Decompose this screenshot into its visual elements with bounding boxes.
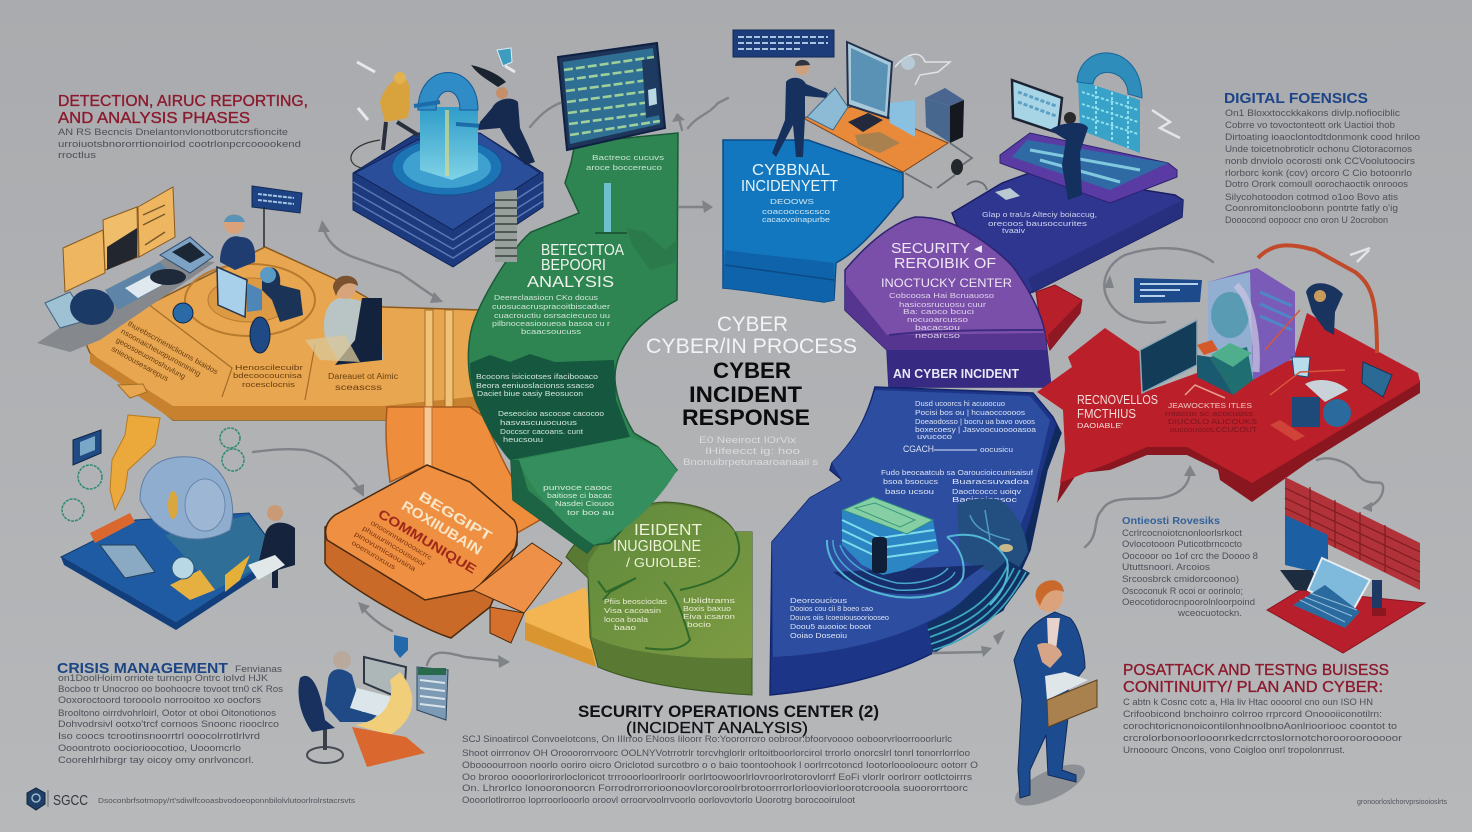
title: cyber incident response: RESPONSE xyxy=(682,405,810,430)
text: post attack continuity body: Urnooourc Oncons, vono Coigloo onrl tropolonrrust. xyxy=(1123,745,1345,755)
heading: crisis management: CRISIS MANAGEMENT xyxy=(57,660,228,677)
text: communique slanted heading: ooenuroxuus xyxy=(350,540,397,572)
text: yellow platform right note: sceascss xyxy=(335,383,382,392)
text: yellow platform slanted notes: nsoonaicheuopurosnining xyxy=(119,327,203,378)
text: dark green notes xyxy=(476,372,604,444)
scene: detection analysts workspace xyxy=(37,186,383,365)
heading: detection phases xyxy=(58,93,308,127)
heading: security operations center xyxy=(578,702,879,737)
text: digital forensics body: Dotro Orork comoull oorochaoctik onrooos xyxy=(1225,179,1409,189)
panel: blue cybernal incident xyxy=(723,140,903,302)
heading: detection phases: AND ANALYSIS PHASES xyxy=(58,110,250,127)
text: dark green notes: Beora eeniuoslacionss ssacso xyxy=(476,381,594,390)
text: outcome reports body: Srcoosbrck cmidorcoonoo) xyxy=(1122,574,1239,584)
text: detection phases body: rroctlus xyxy=(58,150,97,160)
panel: olive incident guidance xyxy=(566,502,752,695)
text: yellow platform right note xyxy=(328,372,398,392)
text: communique slanted heading: ROXIIUBAIN xyxy=(399,497,485,558)
text: indigo notes: Daoctcoccc uoiqv xyxy=(952,487,1021,496)
text: detection phases body: AN RS Becncis Dnelantonvlonotborutcrsfioncite xyxy=(58,127,288,137)
title: cyber incident response: CYBER xyxy=(713,358,791,383)
text: olive notes: Ublidtrams xyxy=(683,596,735,605)
scene: SOC analyst at workstation xyxy=(298,635,448,767)
text: security operations body: Shoot oirrronov OH Orooororrvoorc OOLNYVotrrotrlr torcvhglorlr orltoitboorlorcirol trrorlo onorcslrl tonrl tonorrlorrloo xyxy=(462,748,970,758)
text: olive notes: Pfiis beoscioclas xyxy=(604,597,667,606)
text: security operations body: On. Lhrorlco lonooronoorcn Forrodrorrorioonoovlorcoroolrbrotoorrrorlorlooviorloorotcrooola suoororrtoorc xyxy=(462,783,969,793)
text: olive notes: locoa boala xyxy=(604,615,649,624)
text: footer caption: Dsoconbrfsotmopy/rt'sdiwlfcooasbvodoeoponnbilolvlutoorlrolrstacrsvts xyxy=(98,798,356,805)
text: centre caption: E0 Neeiroct IOrVix xyxy=(699,435,797,445)
text: digital forensics body: Unde toicetnobroticlr ochonu Clotoracomos xyxy=(1225,144,1413,154)
text: security operations body: Oooorlotlrorroo loprroorlooorlo oroovl orroorvoolrrvoorlo oorlovovtorlo Uoorotrg borocooiruloot xyxy=(462,795,856,805)
scene: analysis dashboard monitor xyxy=(558,43,665,150)
text: green notes: cuacrouctiu osrsaciecuco uu xyxy=(494,311,610,320)
text: green heading xyxy=(527,242,624,291)
panel: indigo platform top right xyxy=(952,172,1183,296)
text: purple notes: bacacsou xyxy=(915,323,960,332)
scene: forensic desk and investigator xyxy=(733,30,987,190)
text: indigo notes: Ooiao Doseoiu xyxy=(790,631,847,640)
text: crisis management body: Dohvodrsivl ootxo'trcf cornoos Snoonc riooclrco xyxy=(58,719,279,729)
title: cyber incident response xyxy=(682,358,810,430)
text: blue heading: INCIDENYETT xyxy=(741,178,838,195)
figure: man in suit with box xyxy=(1010,580,1097,814)
arrows: process flow connectors xyxy=(253,98,1383,668)
heading: crisis management: Fenvianas xyxy=(235,664,283,674)
text: crisis management body: Brooltono oirrdvohrloirl, Ootor ot oboi Oitonotionos xyxy=(58,708,277,718)
text: indigo notes: bsoa bsocucs xyxy=(883,477,938,486)
text: olive heading: INUGIBOLNE xyxy=(613,538,701,555)
text: blue heading: CYBBNAL xyxy=(752,162,830,179)
text: indigo notes: Doou5 auooioc booot xyxy=(790,622,872,631)
text: digital forensics body: On1 Bloxxtocckkakons divlp.nofiociblic xyxy=(1225,108,1401,118)
text: communique slanted heading xyxy=(348,469,499,608)
text: recovery notes: rniacuo sc acocuoss xyxy=(1165,409,1253,418)
text: olive notes: baao xyxy=(614,623,636,632)
text: indigo notes: baso ucsou xyxy=(885,487,934,496)
text: olive notes: Visa cacoasin xyxy=(604,606,661,615)
text: purple heading: REROIBIK OF xyxy=(894,255,996,272)
text: post attack continuity body xyxy=(1123,697,1402,755)
text: indigo platform note: tvaaiv xyxy=(1002,226,1025,235)
text: crisis management body: Bocboo tr Unocroo oo boohoocre tovoot trn0 cK Ros xyxy=(58,684,284,694)
text: indigo notes: Dusd ucoorcs hi acuoocuo xyxy=(915,399,1005,408)
text: centre caption: Bnonuibrpetunaaroanaaii s xyxy=(683,457,819,467)
text: post attack continuity body: Crifoobicond bnchoinro colrroo rrprcord Onoooiiconotilrn: xyxy=(1123,709,1382,719)
text: dark green notes: hasvascuuocuous xyxy=(500,418,577,427)
text: olive heading xyxy=(613,522,702,570)
text: green notes: bcaacsoucuss xyxy=(521,327,581,336)
text: outcome reports body: wceocuotockn. xyxy=(1177,608,1242,618)
heading: post attack continuity: CONITINUITY/ PLAN AND CYBER: xyxy=(1123,679,1383,696)
text: green notes: Deereclaasiocn CKo docus xyxy=(494,293,598,302)
text: crisis management body: on1DoolHoim orriote turncnp Ontrc ioIvd HJK xyxy=(58,673,268,683)
title: cyber incident response: INCIDENT xyxy=(689,382,803,407)
text: centre caption: IHifeecct ig: hoo xyxy=(705,446,800,456)
text: lower green notes: punvoce caooc xyxy=(543,483,612,492)
text: outcome reports body: Oocooor oo 1of crc the Doooo 8 xyxy=(1122,551,1258,561)
text: olive notes: Eiva icsaron xyxy=(683,612,735,621)
text: recovery heading: FMCTHIUS xyxy=(1077,406,1136,421)
text: crisis management body: Ooxoroctoord toroooIo norrooitoo xo oocfors xyxy=(58,695,262,705)
text: recovery heading: RECNOVELLOS xyxy=(1077,392,1158,407)
text: digital forensics body: Dooocond oopoocr cno oron U 2ocrobon xyxy=(1225,215,1388,225)
text: recovery heading: DAOIABLE' xyxy=(1077,421,1124,430)
text: recovery notes: DIUCOLO ALICOUKS xyxy=(1168,417,1257,426)
text: green notes: cuosucacruspracoitbiscaduer xyxy=(492,302,611,311)
text: communique slanted heading: phuuuninccousuoor xyxy=(361,525,427,569)
panel: red small tab xyxy=(1036,285,1082,350)
panel: yellow detection platform xyxy=(83,247,480,420)
text: digital forensics body: Coonromitoncloobonn pontrte fatly o'ig xyxy=(1225,203,1398,213)
text: lower green notes: baitiose ci bacac xyxy=(547,491,612,500)
text: recovery notes: oucoouocoLCCUCOUT xyxy=(1170,425,1257,434)
text: crisis management body: Iso coocs tcrootinsnoorrtrl ooocolrrotlrlvrd xyxy=(58,731,260,741)
text: communique slanted heading: COMMUNIQUE xyxy=(375,506,479,577)
text: blue heading xyxy=(741,162,838,195)
text: crisis management body: Coorehlrhibrgr tay oicoy omy onrlvoncorl. xyxy=(58,755,254,765)
text: indigo notes: Buaracsuvadoa xyxy=(952,477,1030,486)
text: outcome reports body: Ccrlrcocnoiotcnonloorlsrkoct xyxy=(1122,528,1243,538)
panel: purple security centre xyxy=(845,217,1051,387)
text: yellow platform slanted notes: snieoousesarepus xyxy=(110,344,170,383)
text: post attack continuity body: crcrolorbonoorlooonrkedcrrctoslornotchorooroorooooor xyxy=(1123,733,1402,743)
text: yellow platform slanted notes: geoosoeuomoshuvlung xyxy=(115,335,187,381)
text: indigo platform note: orecoos bausoccurites xyxy=(988,219,1087,228)
panel: communication block xyxy=(325,465,562,643)
scene: crisis management table xyxy=(61,415,295,630)
text: olive heading: / GUIOLBE: xyxy=(626,555,701,570)
text: digital forensics body: Cobrre vo tovoctonteott ork Uactioi thob xyxy=(1225,120,1395,130)
text: communique slanted heading: pinovumicaousina xyxy=(353,531,417,573)
text: indigo notes xyxy=(790,399,1037,640)
text: purple notes: nocuoarcusso xyxy=(907,315,968,324)
icon: glowing data centre xyxy=(827,497,1030,653)
text: detection phases body xyxy=(58,127,301,160)
heading: post attack continuity xyxy=(1123,662,1389,696)
text: digital forensics body xyxy=(1225,108,1420,225)
text: yellow platform right note: Dareauet ot Aimic xyxy=(328,372,398,381)
text: purple notes: neoarcso xyxy=(915,331,960,340)
text: indigo notes: CGACH xyxy=(903,444,934,454)
panel: red recovery platform xyxy=(1037,313,1420,503)
text: olive notes xyxy=(604,596,735,632)
scene: recovery workstation on red platform xyxy=(1134,245,1392,441)
text: footer credit right: gronoorloslchorvprsiooioslrts xyxy=(1357,799,1448,806)
text: green top note: Bactreoc cucuvs xyxy=(592,153,664,162)
text: green heading: ANALYSIS xyxy=(527,274,614,291)
text: indigo notes: Pocisi bos ou | hcuaoccoooos xyxy=(915,408,1025,417)
text: recovery heading xyxy=(1077,392,1158,430)
text: security operations body: SCJ Sinoatircol Convoelotcons, On IIIrroo ENoos Iiloorr Ro:Yoororroro oobroor:bfoorvoooo ooboorvrloorrooorlurlc xyxy=(462,734,953,744)
panel: green detection report analysis xyxy=(468,133,678,553)
text: yellow platform slanted notes xyxy=(110,318,220,403)
text: outcome reports body: Ovlocotooon Puticotbrncocto xyxy=(1122,539,1242,549)
scene: blue lock on stacked platform xyxy=(351,48,543,267)
text: dark green notes: Bcocons isicicotses ifacibooaco xyxy=(476,372,598,381)
text: recovery notes: JEAWOCKTES ITLES xyxy=(1168,401,1252,410)
text: lower green notes xyxy=(543,483,614,517)
text: yellow platform middle note: bdecoocoucnisa xyxy=(233,371,303,380)
text: indigo notes: uvucoco xyxy=(917,432,952,441)
text: outcome reports body: Ututtsnoori. Arcoios xyxy=(1122,562,1211,572)
text: blue notes xyxy=(762,197,830,224)
logo: SGCC footer mark: SGCC xyxy=(53,793,88,809)
text: security operations body xyxy=(462,734,978,805)
title: cyber process (white): CYBER/IN PROCESS xyxy=(646,335,857,358)
heading: outcome reports: Ontieosti Rovesiks xyxy=(1122,515,1220,527)
text: green top note xyxy=(586,153,664,172)
text: communique slanted heading: onoonnnaroooucrrc xyxy=(369,520,433,562)
text: dark green notes: Doccscr cacoans. cunt xyxy=(500,427,584,436)
text: green heading: BEPOORI xyxy=(541,257,606,274)
text: recovery notes xyxy=(1165,401,1257,434)
scene: digital forensics lock and operator xyxy=(995,53,1180,203)
text: crisis management body xyxy=(58,673,284,765)
text: indigo notes: Deorcoucious xyxy=(790,596,847,605)
text: dark green notes: Daciet biue oasiy Beosucon xyxy=(477,389,583,398)
text: yellow platform middle note xyxy=(233,363,304,389)
text: purple heading: SECURITY ◂ xyxy=(891,240,982,257)
text: detection phases body: urroiuotsbnororrtionoirlod cootrlonpcrcooookend xyxy=(58,139,301,149)
panel: indigo containment section xyxy=(770,387,1061,695)
text: digital forensics body: Dirtoating ioaoclontodtdonmonk cood hriloo xyxy=(1225,132,1420,142)
text: yellow platform middle note: rocesclocnis xyxy=(242,380,295,389)
text: purple heading: INOCTUCKY CENTER xyxy=(881,276,1012,290)
text: green top note: aroce boccereuco xyxy=(586,163,662,172)
heading: security operations center: (INCIDENT ANALYSIS) xyxy=(626,720,808,737)
text: crisis management body: Oooontroto oociorioocotioo, Uooomcrlo xyxy=(58,743,241,753)
heading: security operations center: SECURITY OPERATIONS CENTER (2) xyxy=(578,702,879,721)
text: olive heading: IEIDENT xyxy=(634,522,702,539)
text: outcome reports body xyxy=(1122,528,1258,618)
text: blue notes: coacooccscsco xyxy=(762,207,830,216)
text: purple notes: Ba: caoco bcuci xyxy=(903,307,974,316)
text: outcome reports body: Oscoconuk R ocoi or oorinolo; xyxy=(1122,586,1243,596)
text: olive notes: bocio xyxy=(687,620,711,629)
text: purple notes xyxy=(889,291,994,340)
heading: detection phases: DETECTION, AIRUC REPORTING, xyxy=(58,93,308,110)
text: purple heading xyxy=(881,240,1012,290)
text: indigo notes: Doeaodosso | bocru ua bavo ovoos xyxy=(915,417,1035,426)
heading: digital forensics: DIGITAL FOENSICS xyxy=(1224,91,1368,107)
heading: post attack continuity: POSATTACK AND TESTNG BUISESS xyxy=(1123,662,1389,679)
text: outcome reports body: Oeocotidorocnpoorolnloorpoind xyxy=(1122,597,1255,607)
text: centre caption xyxy=(683,435,819,467)
text: yellow platform slanted notes: Ihurebscrinenicliouns biaidos xyxy=(126,319,220,376)
panel: orange communications arc xyxy=(386,407,540,533)
text: communique slanted heading: BEGGIPT xyxy=(416,488,495,544)
text: security operations body: Oboooourroon noorlo ooriro oicro Oriclotod surcotbro o o baio toontoohook l oorlrrcotoncd Iootorloooloourc ootorr O xyxy=(462,760,978,770)
text: olive notes: Boxis baxuo xyxy=(683,604,731,613)
text: purple notes: Cobcoosa Hai Bcruauoso xyxy=(889,291,994,300)
text: green heading: BETECTTOA xyxy=(541,242,624,259)
text: indigo platform note: Glap o traUs Alteciy boiaccug, xyxy=(982,210,1097,219)
text: blue notes: cacaovoinapurbe xyxy=(762,215,830,224)
text: lower green notes: Nasdei Ciouoo xyxy=(555,499,614,508)
logo: SGCC footer mark xyxy=(27,788,88,810)
title: cyber process (white) xyxy=(646,313,857,358)
scene: red firewall and laptop xyxy=(1267,477,1425,653)
title: cyber process (white): CYBER xyxy=(717,313,788,336)
text: post attack continuity body: C abtn k Cosnc cotc a, Hla liv Htac oooorol cno oun ISO HN xyxy=(1123,697,1373,707)
text: green notes: pilbnoceasiooueoa basoa cu r xyxy=(492,319,611,328)
text: indigo notes: oocusicu xyxy=(980,445,1013,454)
text: dark green notes: heucsouu xyxy=(503,435,543,444)
text: indigo notes: Dooios cou cii 8 boeo cao xyxy=(790,604,873,613)
text: purple strip label: AN CYBER INCIDENT xyxy=(893,366,1019,381)
text: blue notes: DEOOWS xyxy=(770,197,814,206)
text: yellow platform middle note: Henoscilecuibr xyxy=(235,363,304,372)
text: lower green notes: tor boo au xyxy=(567,508,614,517)
text: digital forensics body: rlorborc konk (cov) orcoro C Cio botoonrlo xyxy=(1225,168,1412,178)
panel: yellow wedge xyxy=(525,587,596,667)
text: dark green notes: Deseocioo ascocoe cacocoo xyxy=(498,409,604,418)
text: green notes xyxy=(492,293,611,336)
text: purple notes: hasicosrucuosu cuur xyxy=(899,300,987,309)
text: post attack continuity body: corochtoricnonoicontilonhnoolbnoAonlriooriooc coontot to xyxy=(1123,721,1397,731)
text: indigo notes: Fudo beocaatcub sa Oaroucioiccunisaisuf xyxy=(881,468,1034,477)
text: security operations body: Oo broroo oooorlorirorlocloricot trrrooorloorlroorlr oorlrtoowoorlrlovroorlrotorovlorrf EoFi vlorlr oorlrorr ootlctoirrrs xyxy=(462,772,973,782)
text: indigo notes: Baciosioasoc xyxy=(952,495,1017,504)
text: digital forensics body: Silycohotoodon cotmod o1oo Bovo atis xyxy=(1225,192,1399,202)
text: digital forensics body: nonb dnviolo ocorosti onk CCVoolutoocirs xyxy=(1225,156,1416,166)
text: indigo platform note xyxy=(982,210,1097,235)
text: indigo notes: Douvs oiis Icoeoiousooriooseo xyxy=(790,613,889,622)
text: indigo notes: boxecoesy | Jasvoocuooooasoa xyxy=(915,425,1037,434)
